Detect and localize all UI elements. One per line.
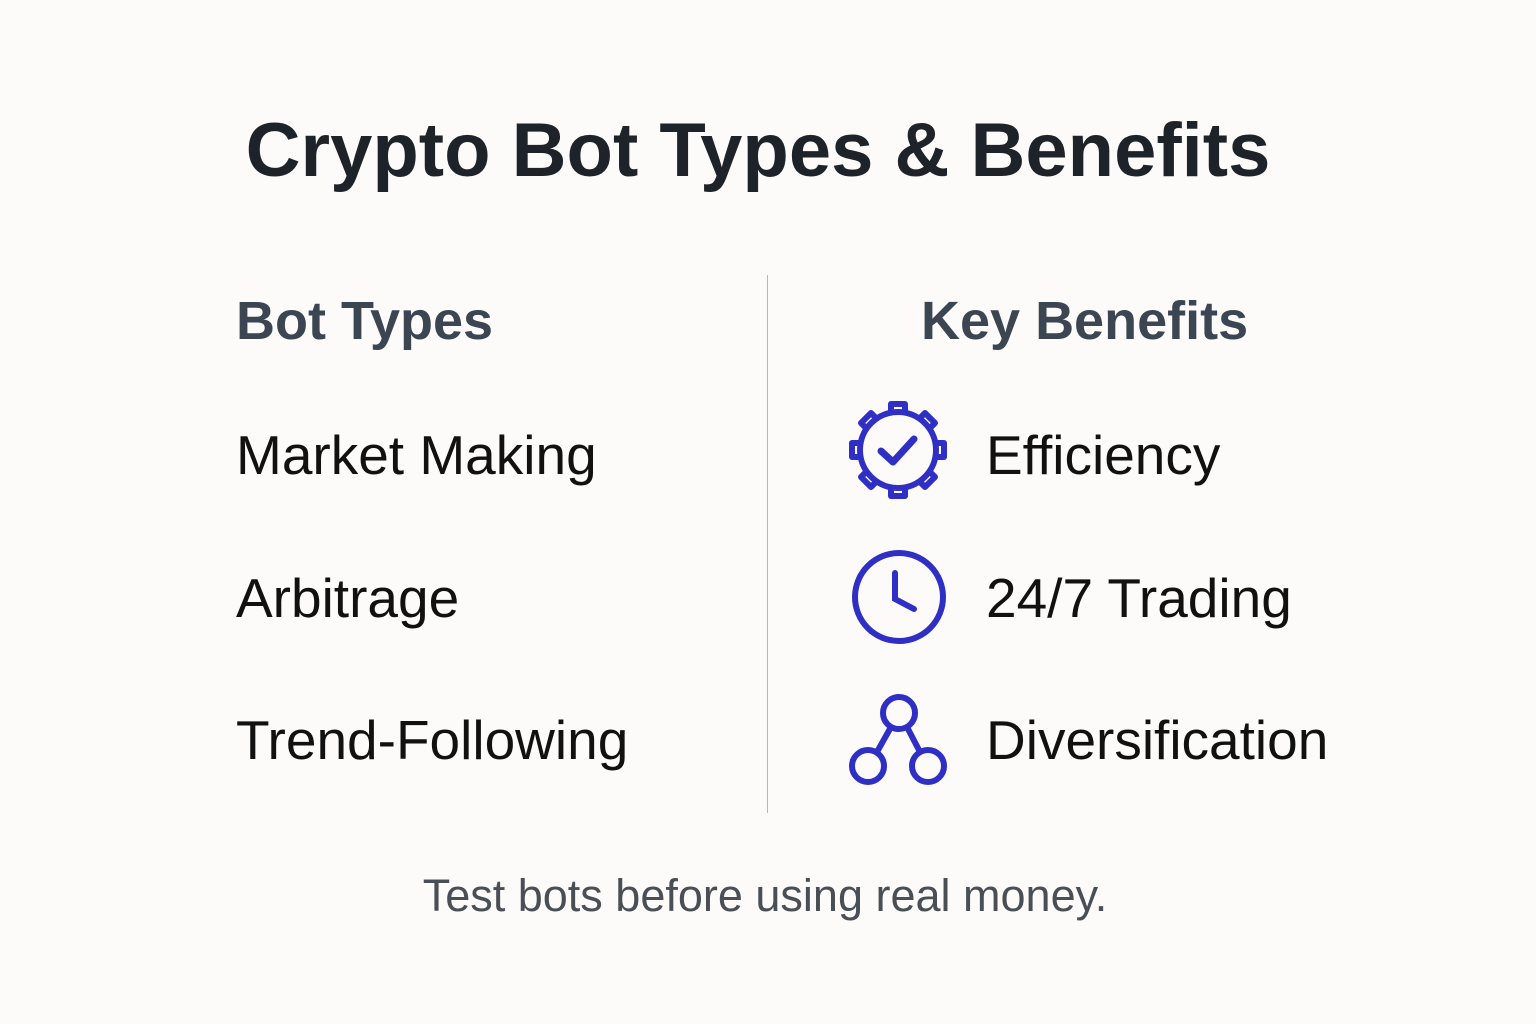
heading: key benefits: Key Benefits (921, 291, 1248, 351)
icon: diversification (849, 694, 947, 785)
bot type: trend-following: Trend-Following (236, 709, 628, 771)
heading: bot types: Bot Types (236, 291, 493, 351)
footer note: Test bots before using real money. (423, 870, 1107, 921)
icon: gear check (849, 401, 947, 499)
bot type: market making: Market Making (236, 424, 597, 486)
benefit: diversification: Diversification (986, 709, 1328, 771)
bot type: arbitrage: Arbitrage (236, 567, 459, 629)
icon: clock (852, 550, 946, 644)
benefit: efficiency: Efficiency (986, 424, 1220, 486)
title: Crypto Bot Types & Benefits (246, 108, 1270, 193)
benefit: 24/7 trading: 24/7 Trading (986, 567, 1292, 629)
divider (767, 275, 768, 813)
